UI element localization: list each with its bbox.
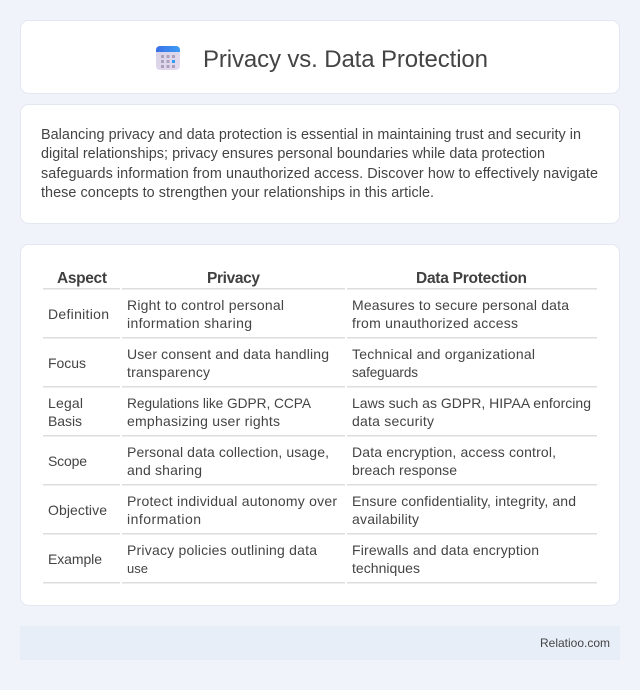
intro text block bbox=[41, 127, 598, 201]
row: scope: Data encryption, access control, bbox=[352, 444, 556, 460]
row: legal basis: Basis bbox=[48, 413, 82, 429]
row: example: Firewalls and data encryption bbox=[352, 542, 539, 558]
row: definition: from unauthorized access bbox=[352, 315, 518, 331]
table header row: Data Protection bbox=[416, 270, 527, 287]
row: legal basis: Regulations like GDPR, CCPA bbox=[127, 396, 312, 411]
row: example: Example bbox=[48, 551, 102, 567]
row: legal basis: Legal bbox=[48, 395, 83, 411]
row: legal basis: Laws such as GDPR, HIPAA enforcing bbox=[352, 395, 591, 411]
row: focus: safeguards bbox=[352, 365, 418, 380]
row: definition bbox=[43, 297, 597, 338]
intro text block: safeguards information from unauthorized access. Discover how to effectively navigate bbox=[41, 166, 598, 182]
row: scope: Personal data collection, usage, bbox=[127, 444, 329, 460]
intro text block: Balancing privacy and data protection is essential in maintaining trust and security in bbox=[41, 127, 581, 143]
row: objective: Objective bbox=[48, 502, 107, 518]
table header row: Aspect bbox=[57, 270, 107, 287]
row: focus: transparency bbox=[127, 364, 210, 380]
footer bar bbox=[20, 626, 620, 660]
row: definition: Right to control personal bbox=[127, 297, 284, 313]
row: example bbox=[43, 542, 597, 584]
row: focus: Focus bbox=[48, 355, 86, 371]
row: focus: User consent and data handling bbox=[127, 346, 329, 362]
panel: introduction bbox=[20, 104, 620, 224]
row: objective: Protect individual autonomy over bbox=[127, 493, 337, 509]
row: example: use bbox=[127, 561, 148, 576]
row: definition: Definition bbox=[48, 306, 109, 322]
row: example: techniques bbox=[352, 560, 420, 576]
row: definition: information sharing bbox=[127, 315, 252, 331]
row: focus: Technical and organizational bbox=[352, 346, 535, 362]
row: legal basis: data security bbox=[352, 413, 434, 429]
panel: comparison table bbox=[20, 244, 620, 606]
row: definition: Measures to secure personal data bbox=[352, 297, 569, 313]
intro text block: these concepts to strengthen your relationships in this article. bbox=[41, 185, 434, 201]
row: scope bbox=[43, 444, 597, 486]
row: scope: and sharing bbox=[127, 462, 202, 478]
row: legal basis: emphasizing user rights bbox=[127, 413, 280, 429]
row: example: Privacy policies outlining data bbox=[127, 542, 317, 558]
row: scope: Scope bbox=[48, 453, 87, 469]
row: legal basis bbox=[43, 395, 597, 436]
row: objective: availability bbox=[352, 511, 419, 527]
row: focus bbox=[43, 346, 597, 388]
intro text block: digital relationships; privacy ensures personal boundaries while data protection bbox=[41, 146, 545, 162]
row: objective bbox=[43, 493, 597, 534]
row: scope: breach response bbox=[352, 462, 457, 478]
table header row: Privacy bbox=[207, 270, 260, 287]
footer credit: Relatioo.com bbox=[540, 636, 610, 650]
row: objective: Ensure confidentiality, integrity, and bbox=[352, 493, 576, 509]
panel: title header bbox=[20, 20, 620, 94]
icon: calendar bbox=[156, 46, 180, 70]
table header row bbox=[43, 270, 597, 290]
row: objective: information bbox=[127, 511, 201, 527]
title: Privacy vs. Data Protection bbox=[203, 46, 488, 73]
